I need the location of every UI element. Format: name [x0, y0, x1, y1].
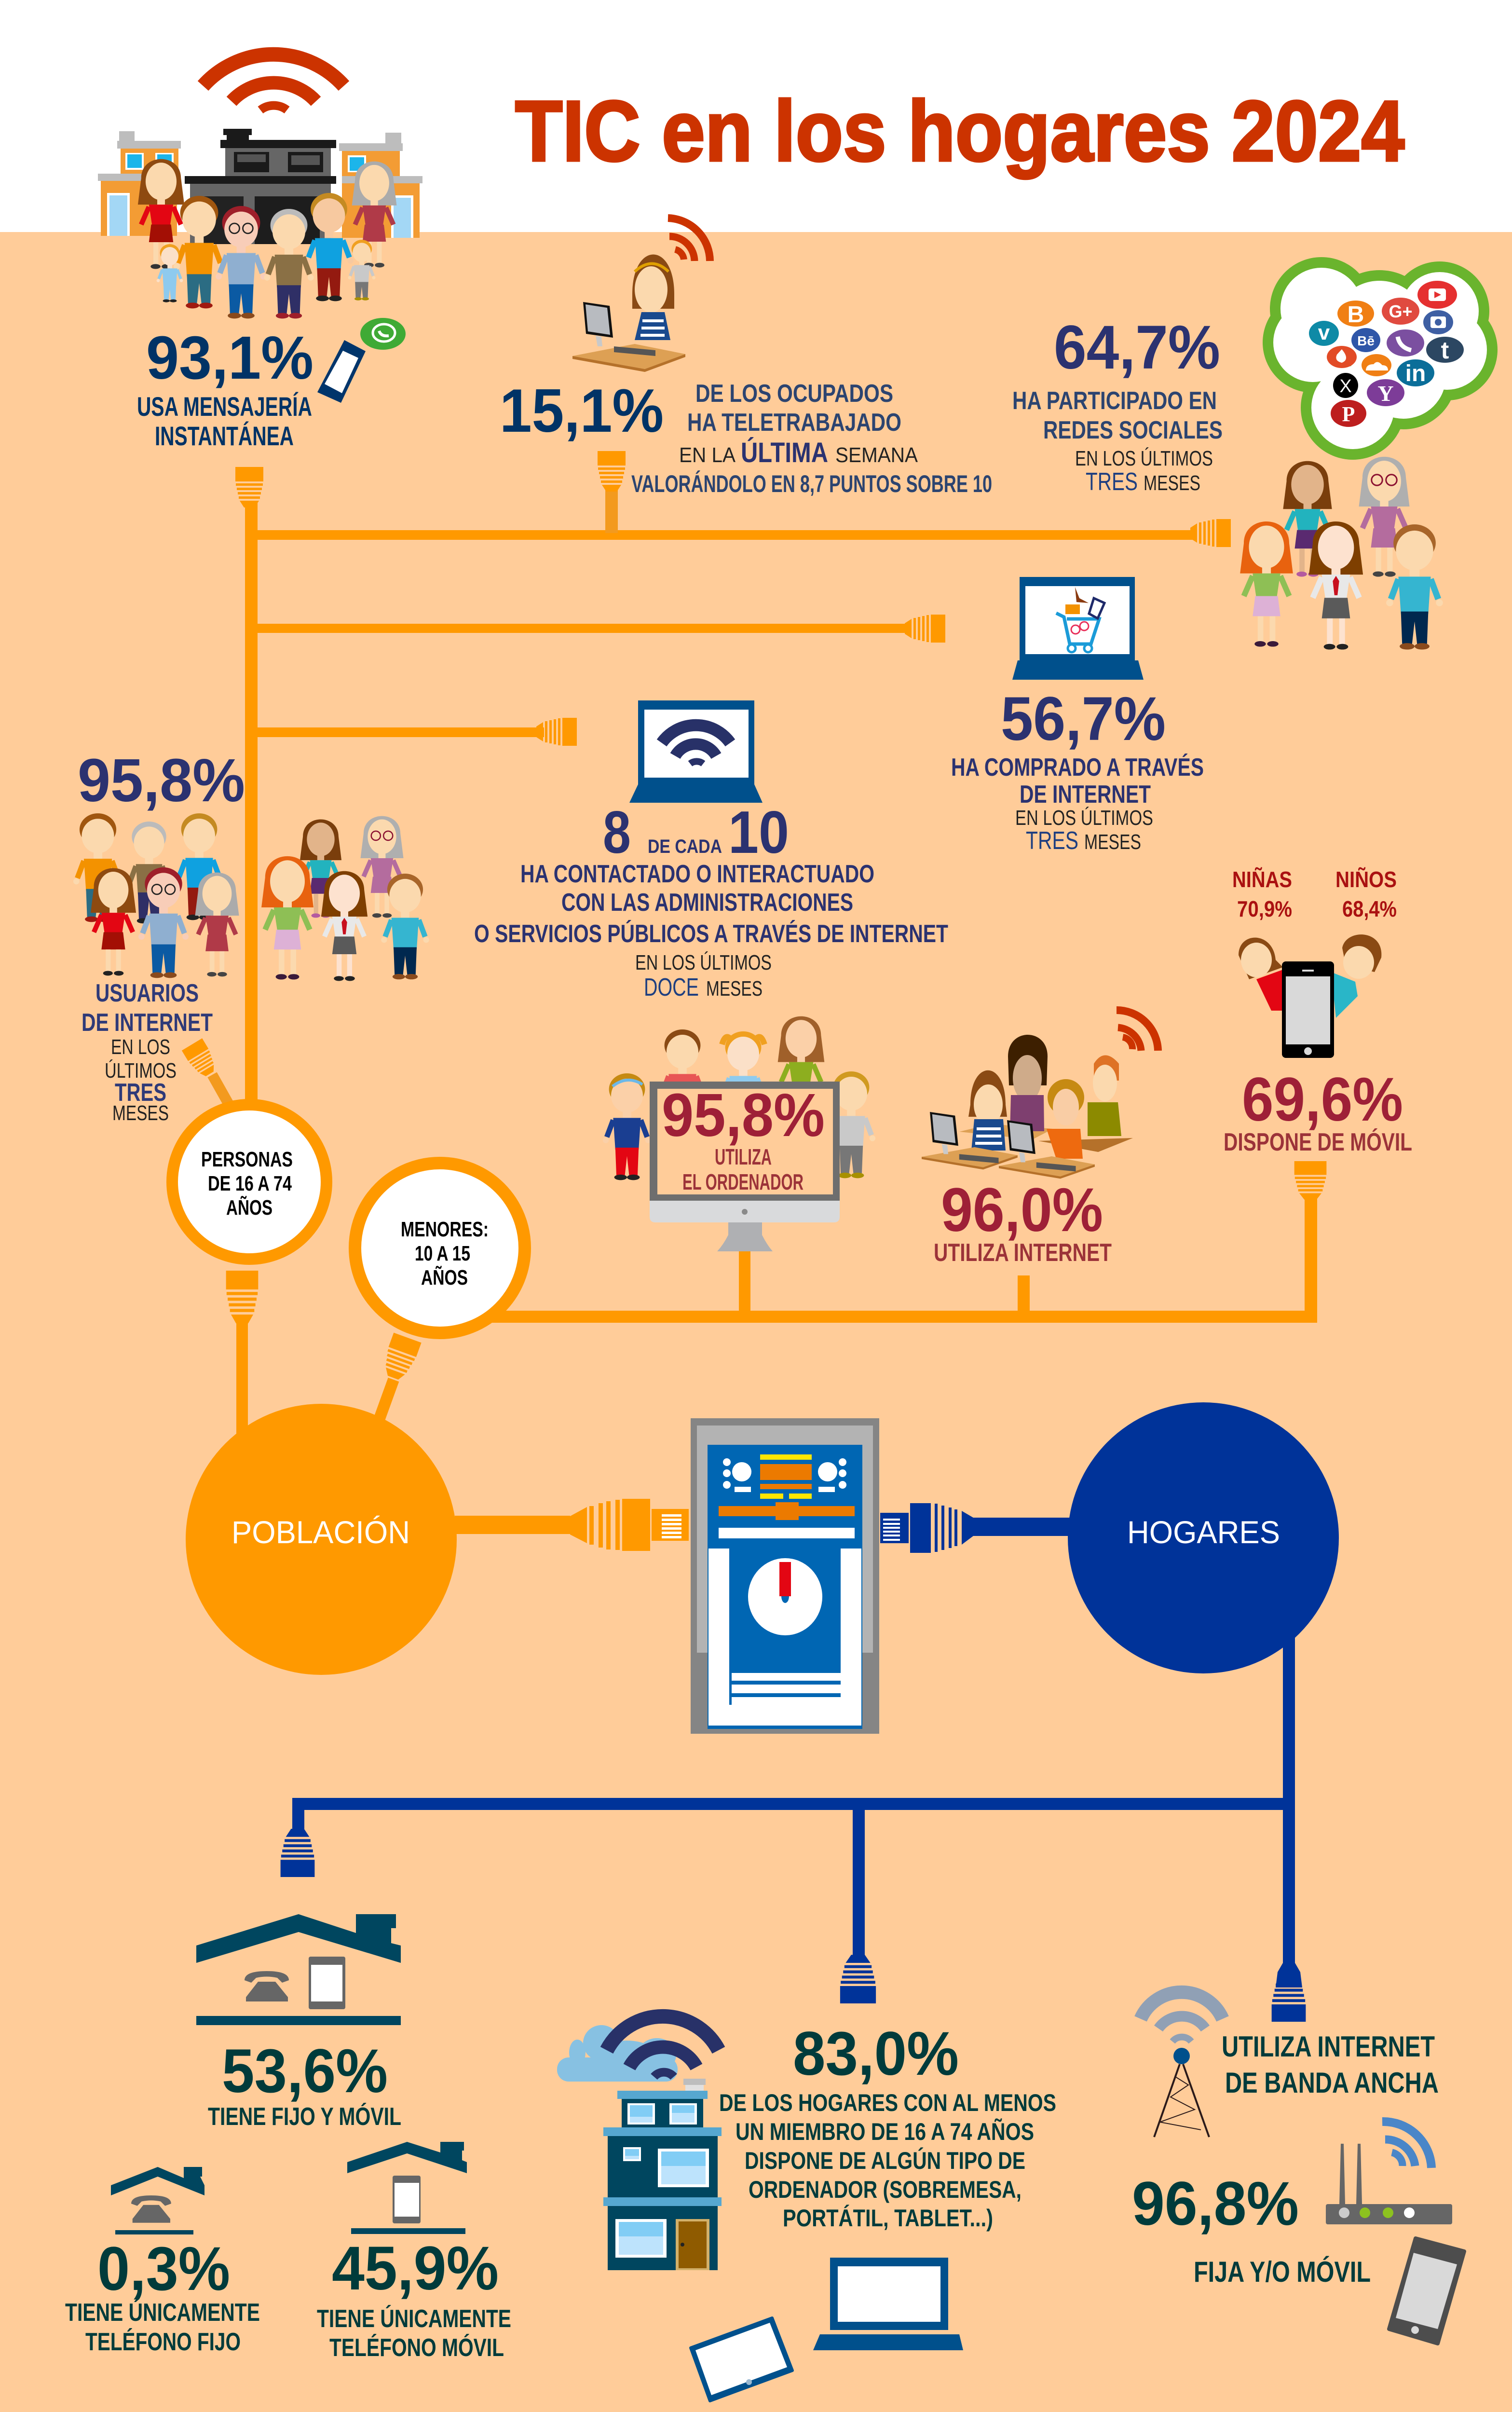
icon: smartphone — [1282, 961, 1334, 1058]
stat: girls and boys mobile split: 70,9% — [1237, 896, 1292, 921]
stat: 64,7% social networks — [1012, 313, 1223, 496]
cable: minors — [491, 1161, 1326, 1323]
stat: 15,1% telework — [500, 376, 992, 497]
title: TIC en los hogares 2024 — [515, 83, 1404, 179]
stat: 56,7% online shopping: HA COMPRADO A TRAVÉS — [951, 754, 1204, 781]
circle: poblacion — [186, 1404, 457, 1675]
stat: 53,6% fixed and mobile — [208, 2037, 401, 2131]
stat: 95,8% internet users: DE INTERNET — [82, 1009, 213, 1037]
illustration: children at computers — [922, 1010, 1158, 1179]
icon: big house with landline and mobile — [196, 1914, 401, 2025]
stat: 95,8% internet users: EN LOS — [111, 1035, 170, 1059]
stat: 53,6% fixed and mobile: TIENE FIJO Y MÓVIL — [208, 2103, 401, 2131]
stat: 0,3% fixed only: 0,3% — [97, 2234, 230, 2303]
icon: social network cloud: v — [1318, 321, 1330, 344]
stat: 8 de cada 10: O SERVICIOS PÚBLICOS A TRAVÉS DE INTERNET — [474, 920, 948, 948]
circle: personas de 16 a 74: PERSONAS — [201, 1148, 293, 1171]
icon: monitor with 95,8% — [650, 1081, 840, 1251]
stat: 8 de cada 10: CON LAS ADMINISTRACIONES — [561, 889, 853, 917]
stat: girls and boys mobile split: NIÑOS — [1335, 867, 1397, 892]
icon: social network cloud: Bē — [1357, 333, 1375, 348]
plug: compras — [905, 615, 945, 643]
stat: 8 de cada 10: DE CADA — [648, 836, 722, 857]
circle: personas de 16 a 74 — [172, 1105, 327, 1259]
illustration: family group — [138, 159, 396, 318]
circle: personas de 16 a 74: AÑOS — [226, 1195, 272, 1220]
blue cable tree — [281, 1638, 1306, 2022]
stat: 69,6% mobile: 69,6% — [1242, 1065, 1403, 1134]
icon: social network cloud: B — [1348, 302, 1364, 328]
stat: banda ancha 96,8%: DE BANDA ANCHA — [1225, 2067, 1439, 2099]
stat: 83,0% computer: PORTÁTIL, TABLET...) — [783, 2205, 993, 2232]
illustration: internet users middle group — [261, 816, 429, 981]
illustration: teleworker — [572, 218, 710, 372]
stat: 8 de cada 10: DOCE — [644, 973, 699, 1001]
icon: monitor with 95,8%: 95,8% — [662, 1081, 825, 1149]
stat: 64,7% social networks: HA PARTICIPADO EN — [1012, 387, 1217, 415]
stat: 15,1% telework: DE LOS OCUPADOS — [695, 380, 893, 408]
icon: social network cloud: P — [1342, 402, 1355, 426]
plug: menores — [379, 1333, 422, 1383]
icon: large wifi — [203, 55, 344, 110]
stat: 8 de cada 10: 8 — [603, 799, 631, 866]
icon: small house with mobile — [347, 2142, 467, 2234]
stat: 8 de cada 10: MESES — [706, 977, 763, 1000]
stat: 15,1% telework: EN LA — [679, 443, 736, 467]
connector: blue ethernet — [880, 1503, 1070, 1553]
plug: administraciones — [536, 718, 577, 746]
icon: building — [603, 2079, 722, 2270]
plug: personas — [226, 1271, 258, 1323]
icon: dial — [748, 1558, 822, 1635]
icon: social network cloud — [1263, 257, 1498, 460]
connector: orange ethernet — [455, 1499, 689, 1551]
stat: 56,7% online shopping: DE INTERNET — [1020, 781, 1151, 809]
icon: social network cloud: in — [1405, 361, 1426, 386]
stat: girls and boys mobile split: NIÑAS — [1232, 867, 1292, 892]
plug: dispone de movil — [1294, 1161, 1326, 1200]
stat: 83,0% computer: 83,0% — [793, 2019, 959, 2088]
icon: wifi laptop — [629, 700, 763, 803]
figure: girl with stripes — [968, 1070, 1007, 1151]
stat: banda ancha 96,8%: UTILIZA INTERNET — [1222, 2030, 1435, 2063]
icon: shopping laptop — [1012, 577, 1144, 680]
figure: man behind — [1008, 1035, 1048, 1131]
plug: usuarios de internet — [182, 1038, 230, 1106]
orange cable tree: adults — [235, 451, 1231, 1110]
icon: whatsapp bubble and phone — [317, 318, 406, 403]
stat: 0,3% fixed only: TELÉFONO FIJO — [85, 2328, 241, 2356]
stat: 83,0% computer: ORDENADOR (SOBREMESA, — [749, 2176, 1022, 2203]
circle: poblacion: POBLACIÓN — [232, 1514, 410, 1550]
figure: curly girl — [1047, 1079, 1084, 1159]
illustration: children with phone — [1239, 934, 1381, 1058]
icon: building wifi — [607, 2016, 719, 2077]
stat: girls and boys mobile split — [1232, 867, 1397, 921]
icon: cloud — [557, 2025, 678, 2082]
stat: 93,1% messaging: USA MENSAJERÍA — [137, 391, 312, 422]
icon: shopping cart — [1056, 587, 1104, 652]
stat: 15,1% telework: HA TELETRABAJADO — [687, 409, 901, 437]
icon: social network cloud: G+ — [1389, 302, 1413, 321]
stat: 69,6% mobile — [1224, 1065, 1412, 1156]
icon: monitor with 95,8%: EL ORDENADOR — [682, 1169, 804, 1194]
icon: laptop — [813, 2258, 963, 2350]
stat: 8 de cada 10: EN LOS ÚLTIMOS — [635, 951, 772, 974]
circle: menores 10 a 15: AÑOS — [421, 1265, 468, 1289]
figure: red haired boy — [1088, 1055, 1121, 1136]
stat: 8 de cada 10 — [474, 799, 948, 1001]
stat: 45,9% mobile only: TELÉFONO MÓVIL — [329, 2334, 504, 2362]
stat: 15,1% telework: VALORÁNDOLO EN 8,7 PUNTOS SOBRE 10 — [631, 470, 992, 497]
stat: 56,7% online shopping: EN LOS ÚLTIMOS — [1015, 806, 1153, 830]
stat: 93,1% messaging — [137, 324, 313, 451]
stat: 83,0% computer: UN MIEMBRO DE 16 A 74 AÑOS — [736, 2118, 1034, 2145]
circle: menores 10 a 15: MENORES: — [401, 1218, 489, 1241]
illustration: neighbourhood houses — [98, 129, 422, 244]
stat: 8 de cada 10: 10 — [728, 799, 789, 866]
stat: 64,7% social networks: EN LOS ÚLTIMOS — [1075, 447, 1213, 470]
stat: 56,7% online shopping: MESES — [1084, 830, 1141, 854]
stat: 64,7% social networks: REDES SOCIALES — [1043, 416, 1223, 444]
connectors to poblacion — [226, 1271, 422, 1447]
icon: router — [1326, 2122, 1452, 2224]
stat: banda ancha 96,8% — [1132, 2030, 1439, 2288]
illustration: internet users left group — [73, 813, 239, 978]
stat: 83,0% computer: DE LOS HOGARES CON AL MENOS — [719, 2089, 1056, 2116]
stat: 95,8% internet users — [78, 746, 245, 1125]
stat: 56,7% online shopping: 56,7% — [1001, 685, 1166, 754]
stat: 8 de cada 10: HA CONTACTADO O INTERACTUADO — [520, 860, 874, 888]
illustration: social network users — [1240, 457, 1443, 650]
stat: 15,1% telework: 15,1% — [500, 376, 664, 445]
stat: 53,6% fixed and mobile: 53,6% — [222, 2037, 388, 2106]
stat: 56,7% online shopping — [951, 685, 1204, 855]
icon: tablet — [691, 2318, 792, 2401]
stat: 64,7% social networks: 64,7% — [1054, 313, 1220, 382]
plug: redes sociales — [1190, 519, 1231, 547]
stat: banda ancha 96,8%: FIJA Y/O MÓVIL — [1194, 2256, 1371, 2288]
plug: mensajeria — [235, 467, 263, 507]
stat: 45,9% mobile only — [317, 2234, 511, 2362]
icon: social network cloud: Y — [1377, 381, 1394, 406]
stat: 64,7% social networks: MESES — [1144, 471, 1200, 495]
circle: personas de 16 a 74: DE 16 A 74 — [208, 1172, 292, 1195]
stat: 15,1% telework: SEMANA — [835, 443, 918, 467]
stat: 83,0% computer: DISPONE DE ALGÚN TIPO DE — [745, 2147, 1025, 2174]
circle: menores 10 a 15 — [355, 1163, 525, 1333]
stat: 0,3% fixed only: TIENE ÚNICAMENTE — [65, 2299, 260, 2327]
stat: 15,1% telework: ÚLTIMA — [741, 437, 828, 468]
illustration: children behind monitor — [603, 1016, 875, 1180]
stat: 0,3% fixed only — [65, 2234, 260, 2356]
stat: 96,0% internet: UTILIZA INTERNET — [934, 1239, 1112, 1267]
stat: 93,1% messaging: INSTANTÁNEA — [155, 421, 294, 451]
icon: small house with landline — [111, 2167, 204, 2234]
stat: 69,6% mobile: DISPONE DE MÓVIL — [1224, 1128, 1412, 1156]
stat: 83,0% computer — [719, 2019, 1056, 2232]
stat: 95,8% internet users: ÚLTIMOS — [105, 1059, 177, 1083]
plug: teletrabajo — [598, 451, 626, 492]
stat: 95,8% internet users: 95,8% — [78, 746, 245, 814]
stat: 64,7% social networks: TRES — [1086, 468, 1138, 496]
stat: banda ancha 96,8%: 96,8% — [1132, 2169, 1299, 2238]
stat: 95,8% internet users: TRES — [115, 1079, 166, 1107]
plug: ordenador — [840, 1955, 876, 2003]
stat: 93,1% messaging: 93,1% — [146, 324, 313, 392]
plug: hogares fijo y movil — [281, 1829, 314, 1877]
device: router cabinet — [691, 1418, 879, 1734]
icon: monitor with 95,8%: UTILIZA — [715, 1144, 772, 1169]
stat: 45,9% mobile only: 45,9% — [332, 2234, 499, 2303]
icon: antenna tower — [1141, 1992, 1223, 2137]
stat: girls and boys mobile split: 68,4% — [1342, 896, 1397, 921]
icon: social network cloud: X — [1339, 376, 1352, 397]
circle: hogares — [1068, 1402, 1339, 1673]
stat: 95,8% internet users: USUARIOS — [95, 979, 199, 1007]
circle: menores 10 a 15: 10 A 15 — [415, 1242, 470, 1265]
icon: mobile phone — [1389, 2238, 1464, 2343]
plug: banda ancha — [1272, 1963, 1306, 2022]
icon: social network cloud: t — [1441, 337, 1449, 364]
stat: 45,9% mobile only: TIENE ÚNICAMENTE — [317, 2305, 511, 2333]
stat: 95,8% internet users: MESES — [112, 1101, 169, 1125]
stat: 56,7% online shopping: TRES — [1026, 827, 1078, 855]
circle: hogares: HOGARES — [1127, 1514, 1280, 1550]
stat: 96,0% internet: 96,0% — [941, 1176, 1103, 1245]
